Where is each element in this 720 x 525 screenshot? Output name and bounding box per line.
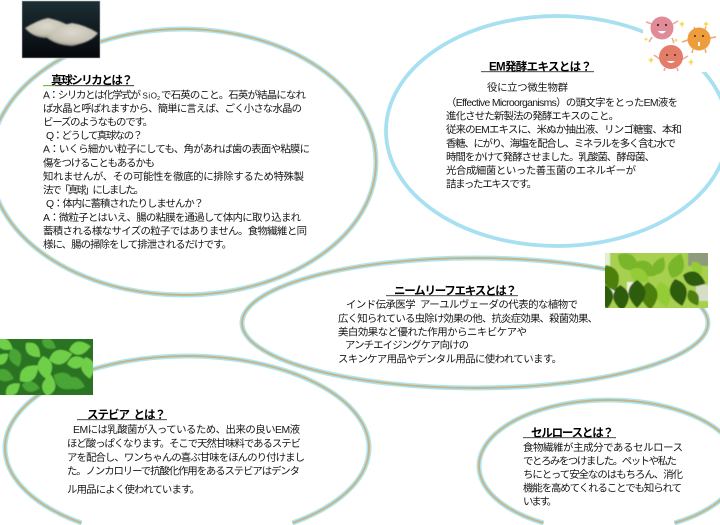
text block: neem explanation: 美白効果など優れた作用からニキビケアや [338, 326, 527, 338]
text block: neem explanation: 広く知られている虫除け効果の他、抗炎症効果、殺菌効果、 [338, 312, 598, 325]
text block: cellulose explanation: 食物繊維が主成分であるセルロース [523, 441, 683, 454]
text block: stevia explanation: EMには乳酸菌が入っているため、出来の良いEM液 [73, 423, 301, 436]
image: silica powder [22, 1, 100, 58]
heading: cellulose: セルロースとは？ [531, 426, 614, 440]
text block: silica explanation: A：微粒子とはいえ、腸の粘膜を通過して体内に取り込まれ [43, 211, 302, 224]
text block: cellulose explanation: でとろみをつけました。ペットや私た [523, 456, 677, 468]
heading: neem: ニームリーフエキスとは？ [394, 284, 517, 298]
text block: EM explanation: 詰まったエキスです。 [446, 178, 537, 190]
text block: silica explanation: SiO [142, 92, 157, 100]
text block: neem explanation: アンチエイジングケア向けの [345, 338, 469, 352]
text block: EM explanation: 香糖、にがり、海塩を配合し、ミネラルを多く含む水で [446, 137, 676, 150]
panel: silica bubble [0, 29, 376, 295]
text block: silica explanation: 知れませんが、その可能性を徹底的に排除するため特殊製 [43, 170, 304, 183]
text block: EM explanation: 従来のEMエキスに、米ぬか抽出液、リンゴ糖蜜、本和 [446, 123, 682, 136]
image: neem leaves [605, 253, 708, 308]
text block: silica explanation: ビーズのようなものです。 [43, 116, 153, 128]
text block: silica explanation: Q：体内に蓄積されたりしませんか？ [46, 197, 204, 210]
text block: EM explanation: 進化させた新製法の発酵エキスのこと。 [446, 110, 619, 122]
panel: EM bubble [386, 16, 720, 246]
text block: silica explanation: ば水晶と呼ばれますから、簡単に言えば、ごく小さな水晶の [43, 102, 302, 115]
text block: stevia explanation: ル用品によく使われています。 [67, 483, 200, 496]
text block: EM explanation [446, 81, 682, 190]
text block: silica explanation: 傷をつけることもあるかも [43, 156, 155, 170]
text block: EM explanation: 役に立つ微生物群 [487, 81, 569, 94]
text block: silica explanation: 法で「真球」にしました。 [43, 184, 144, 196]
heading: EM: EM発酵エキスとは？ [489, 60, 592, 74]
text block: neem explanation: スキンケア用品やデンタル用品に使われています。 [338, 352, 562, 366]
text block: cellulose explanation [523, 441, 684, 508]
text block: silica explanation: 2 [157, 96, 160, 102]
text block: cellulose explanation: 機能を高めてくれることでも知られて [523, 482, 682, 494]
panel: neem bubble [242, 258, 708, 388]
panel: cellulose bubble [479, 400, 720, 523]
text block: EM explanation: 光合成細菌といった善玉菌のエネルギーが [446, 164, 637, 177]
text block: cellulose explanation: います。 [523, 496, 557, 508]
text block: stevia explanation [67, 423, 305, 496]
text block: silica explanation: 様に、腸の掃除をして排泄されるだけです。 [43, 238, 232, 251]
text block: EM explanation: 時間をかけて発酵させました。乳酸菌、酵母菌、 [446, 150, 655, 164]
text block: stevia explanation: た。ノンカロリーで抗酸化作用をあるステビアはデンタ [67, 464, 300, 478]
image: friendly microbes [643, 12, 717, 72]
text block: stevia explanation: アを配合し、ワンちゃんの喜ぶ甘味をほんのり付けまし [67, 451, 305, 464]
heading: silica: 真球シリカとは？ [51, 73, 133, 87]
text block: silica explanation [43, 88, 310, 251]
text block: stevia explanation: ほど酸っぱくなります。そこで天然甘味料であるステビ [67, 437, 301, 450]
text block: silica explanation: A：シリカとは化学式が [43, 88, 142, 102]
image: stevia leaves [0, 339, 93, 395]
text block: neem explanation [338, 298, 598, 366]
text block: neem explanation: インド伝承医学 アーユルヴェーダの代表的な植物で [346, 298, 578, 311]
text block: cellulose explanation: ちにとって安全なのはもちろん、消化 [523, 468, 684, 481]
panel: stevia bubble [5, 356, 369, 523]
text block: EM explanation: （Effective Microorganisms）の頭文字をとったEM液を [446, 96, 678, 109]
text block: silica explanation: Q：どうして真球なの？ [46, 129, 143, 142]
text block: silica explanation: で石英のこと。石英が結晶になれ [161, 88, 307, 102]
text block: silica explanation: A：いくら細かい粒子にしても、角があれば歯の表面や粘膜に [43, 142, 310, 156]
text block: silica explanation: 蓄積される様なサイズの粒子ではありません。食物繊維と同 [43, 224, 307, 238]
heading: stevia: ステビア とは？ [87, 408, 166, 422]
